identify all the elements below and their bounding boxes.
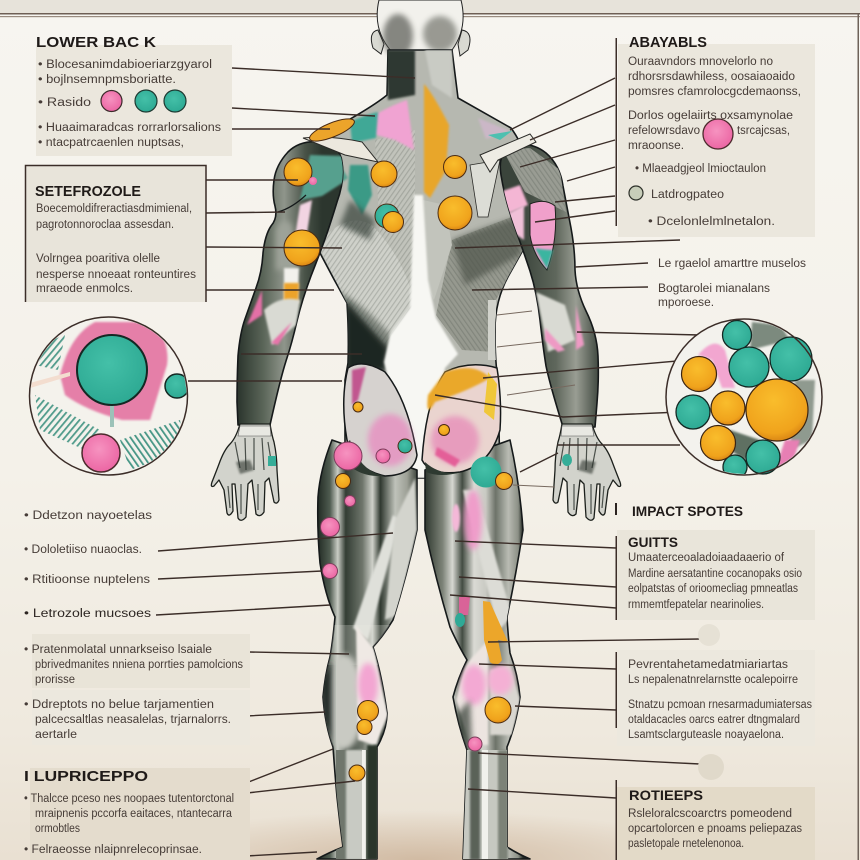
panel: pratenmolatal: pbrivedmanites nniena porrties pamolcions [35, 659, 243, 671]
head [371, 0, 470, 60]
heading: lupriceppo: I LUPRICEPPO [24, 768, 148, 785]
callout: left circle detail [30, 317, 189, 475]
panel: preventa: Stnatzu pcmoan rnesarmadumiatersas [628, 699, 812, 711]
panel: guitts [616, 530, 815, 620]
impact spots on figure [284, 115, 512, 781]
panel: guitts: Mardine aersatantine cocanopaks osio [628, 568, 802, 580]
panel: abayabls: Ouraavndors mnovelorlo no [628, 56, 773, 68]
marker [698, 754, 724, 780]
label: le rgaelol: Le rgaelol amarttre muselos [658, 258, 806, 270]
left leg [317, 440, 417, 860]
panel: preventa [616, 650, 815, 746]
leader lines [156, 68, 700, 856]
right leg [425, 440, 530, 860]
callout: right circle detail [666, 319, 822, 479]
heading: guitts: GUITTS [628, 534, 678, 550]
panel: pratenmolatal: prorisse [35, 674, 75, 686]
neck [386, 50, 415, 100]
body figure [211, 0, 621, 860]
heading: impact spots: IMPACT SPOTES [632, 503, 743, 519]
panel: abayabls: pomsres cfamrolocgcdemaonss, [628, 86, 801, 98]
trapezius teal [350, 112, 378, 143]
left arm [237, 142, 350, 425]
panel: lupriceppo: • Thalcce pceso nes noopaes tutentorctonal [24, 793, 234, 805]
heading: setefrozole: SETEFROZOLE [35, 183, 141, 200]
panel: abayabls: rdhorsrsdawhiless, oosaiaoaido [628, 71, 795, 83]
mid back near spine [375, 130, 415, 286]
panel: ddreptots: aertarle [35, 729, 77, 741]
panel: ddreptots: • Ddreptots no belue tarjamentien [24, 699, 214, 711]
panel: lower back: • bojlnsemnpmsboriatte. [38, 74, 176, 86]
panel: lupriceppo: ormobtles [35, 823, 80, 835]
dark flank [345, 300, 388, 372]
panel: preventa: Pevrentahetamedatmiariartas [628, 659, 788, 671]
marker [698, 624, 720, 646]
panel: abayabls: • Mlaeadgjeol lmioctaulon [635, 163, 766, 175]
panel: setefrozole: Boecemoldifreractiasdmimienal, [36, 203, 192, 215]
panel: lower back: • Blocesanimdabioeriarzgyarol [38, 59, 212, 71]
muscle labels: left list: • Rtitioonse nuptelens [24, 574, 150, 586]
muscle labels: left list: • Letrozole mucsoes [24, 608, 151, 620]
heading: rotieeps: ROTIEEPS [629, 787, 703, 803]
panel: lower back: • ntacpatrcaenlen nuptsas, [38, 137, 184, 149]
panel: lupriceppo: • Felraeosse nlaipnrelecoprinsae. [24, 844, 202, 856]
label: bogtarolei [658, 283, 770, 309]
torso [310, 50, 530, 478]
panel: setefrozole: mraeode enmolcs. [36, 283, 133, 295]
panel: lower back: • Rasido [38, 97, 91, 109]
gluteal muscles [340, 364, 501, 476]
panel: pratenmolatal: • Pratenmolatal unnarkseiso lsaiale [24, 644, 212, 656]
panel: rotieeps: opcartolorcen e pnoams peliepazas [628, 823, 802, 835]
spine orange band [424, 84, 449, 198]
panel: lower back: • Huaaimaradcas rorrarlorsalions [38, 122, 221, 134]
panel: guitts: eolpatstas of orioomecliag pmneatlas [628, 583, 798, 595]
floor shading [180, 780, 660, 860]
label: bogtarolei: mporoese. [658, 297, 714, 309]
scapula teal [342, 168, 348, 183]
icon: left hand [211, 424, 279, 520]
shoulder highlights [303, 134, 536, 172]
panel: rotieeps: pasletopale rnetelenonoa. [628, 838, 744, 850]
panel: preventa: Ls nepalenatnrelarnstte ocalepoirre [628, 674, 798, 686]
panel: abayabls: • Dcelonlelmlnetalon. [648, 216, 775, 228]
panel: setefrozole: Volrngea poaritiva olelle [36, 253, 160, 265]
panel: abayabls: mraoonse. [628, 140, 684, 152]
panel: abayabls: Latdrogpateo [651, 189, 724, 201]
muscle labels: left list: • Ddetzon nayoetelas [24, 510, 152, 522]
panel: preventa: otaldacacles oarcs eatrer dtngmalard [628, 714, 800, 726]
panel: lower back [36, 34, 232, 156]
panel: ddreptots: palcecsaltlas neasalelas, trjarnalorrs. [35, 714, 231, 726]
label: bogtarolei: Bogtarolei mianalans [658, 283, 770, 295]
panel: setefrozole: pagrotonnoroclaa assesdan. [36, 219, 174, 231]
panel: abayabls: tsrcajcsas, [737, 125, 790, 137]
panel: rotieeps: Rsleloralcscoarctrs pomeodend [628, 808, 792, 820]
heading: abayabls: ABAYABLS [629, 34, 707, 51]
panel: preventa: Lsamtsclarguteasle noayaelona. [628, 729, 784, 741]
panel: setefrozole: nesperse nnoeaat ronteuntires [36, 269, 196, 281]
muscle labels: left list: • Dololetiiso nuaoclas. [24, 544, 142, 556]
panel: abayabls: refelowrsdavo [628, 125, 700, 137]
panel: rotieeps [616, 780, 815, 860]
panel: ddreptots [24, 690, 250, 745]
panel: abayabls: Dorlos ogelaiirts oxsamynolae [628, 110, 793, 122]
muscle labels: left list [24, 510, 152, 620]
panel: guitts: Umaaterceoaladoiaadaaerio of [628, 552, 785, 564]
header band [0, 0, 860, 17]
white lower back tendon [384, 195, 458, 478]
right lat [436, 212, 525, 352]
panel: guitts: rmmemtfepatelar nearinolies. [628, 599, 764, 611]
right arm [500, 144, 598, 427]
trapezius pink [373, 100, 414, 150]
icon: right hand [553, 424, 621, 520]
left lat [322, 222, 411, 342]
panel: setefrozole [26, 166, 206, 302]
heading: lower back: LOWER BAC K [36, 34, 156, 51]
panel: lupriceppo: mraipnenis pccorfa eaitaces, ntantecarra [35, 808, 233, 820]
panel: pratenmolatal [24, 634, 250, 688]
panel: lupriceppo [24, 768, 250, 860]
panel: abayabls [616, 34, 815, 237]
